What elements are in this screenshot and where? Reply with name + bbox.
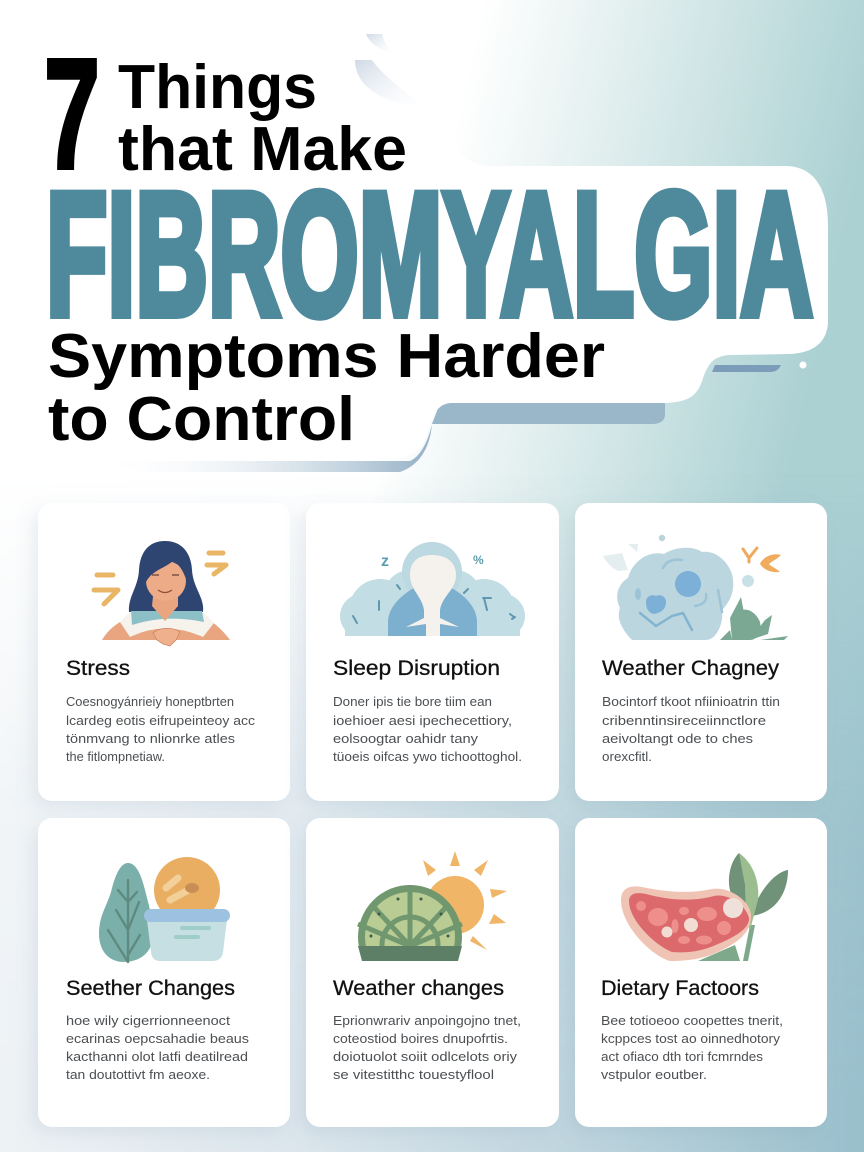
text: Seether Changes description xyxy=(66,1013,250,1082)
text: Sleep Disruption description: ioehioer aesi ipechecettiory, xyxy=(333,713,512,728)
text: Weather changes description: Eprionwrariv anpoingojno tnet, xyxy=(333,1013,521,1028)
icon: woman xyxy=(94,541,230,646)
heading: Weather changes: Weather changes xyxy=(333,977,504,1000)
text: Stress description: the fitlompnetiaw. xyxy=(66,749,165,764)
title: Things: Things xyxy=(118,53,317,122)
text: Stress description: tönmvang to nlionrke atles xyxy=(66,731,236,746)
panel: Weather changes xyxy=(306,818,559,1127)
text: Weather Chagney description: aeivoltangt ode to ches xyxy=(602,731,754,746)
text: Dietary Factors description xyxy=(601,1013,783,1082)
icon: meat and leaves xyxy=(621,853,788,961)
icon: sleeper in cloud: z xyxy=(381,553,389,570)
icon: stress marks xyxy=(94,553,226,604)
heading: Weather Chagney: Weather Chagney xyxy=(602,657,780,680)
heading: Sleep Disruption: Sleep Disruption xyxy=(333,657,500,680)
title: Symptoms Harder: Symptoms Harder xyxy=(48,322,605,391)
text: Weather Chagney description: cribenntinsireceiinnctlore xyxy=(602,713,766,728)
text: Sleep Disruption description: Doner ipis tie bore tiim ean xyxy=(333,694,492,709)
text: Dietary Factors description: act ofiaco dth tori fcmrndes xyxy=(601,1049,764,1064)
text: Dietary Factors description: vstpulor eoutber. xyxy=(601,1067,707,1082)
text: Dietary Factors description: kcppces tost ao oinnedhotory xyxy=(601,1031,781,1046)
heading: Stress: Stress xyxy=(66,657,130,680)
icon: leaves xyxy=(720,597,788,640)
text: Stress description: lcardeg eotis eifrupeinteoy acc xyxy=(66,713,256,728)
title: that Make: that Make xyxy=(118,115,407,184)
icon: sleeper in cloud: % xyxy=(473,553,484,567)
icon: orange marks xyxy=(743,548,781,572)
icon: leaf and food container xyxy=(99,857,230,962)
icon: weather cloud with leaves xyxy=(603,535,788,640)
text: Weather Chagney description xyxy=(602,694,780,764)
title xyxy=(44,27,813,454)
icon: meat marbling xyxy=(636,901,731,944)
heading: Dietary Factors: Dietary Factoors xyxy=(601,977,759,1000)
text: Dietary Factors description: Bee totioeoo coopettes tnerit, xyxy=(601,1013,783,1028)
panel: Weather Chagney xyxy=(575,503,827,801)
icon: greenhouse dome xyxy=(357,885,463,961)
text: Weather changes description: coteostiod boires dnupofrtis. xyxy=(333,1031,508,1046)
text: Stress description: Coesnogyánrieiy honeptbrten xyxy=(66,694,234,709)
panel: Stress xyxy=(38,503,290,801)
text: Weather Chagney description: Bocintorf tkoot nfiinioatrin ttin xyxy=(602,694,780,709)
panel: Dietary Factors xyxy=(575,818,827,1127)
title: to Control: to Control xyxy=(48,385,355,454)
text: Weather Chagney description: orexcfitl. xyxy=(602,749,652,764)
text: Sleep Disruption description: tüoeis oifcas ywo tichoottoghol. xyxy=(333,749,522,764)
panel: Sleep Disruption xyxy=(306,503,559,801)
text: Seether Changes description: kacthanni olot latfi deatilread xyxy=(66,1049,248,1064)
text: Stress description xyxy=(66,694,256,764)
text: Weather changes description: se vitestitthc touestyflool xyxy=(333,1067,494,1082)
heading: Seether Changes: Seether Changes xyxy=(66,977,235,1000)
panel: Seether Changes xyxy=(38,818,290,1127)
text: Weather changes description: doiotuolot soiit odlcelots oriy xyxy=(333,1049,518,1064)
text: Seether Changes description: tan doutottivt fm aeoxe. xyxy=(66,1067,210,1082)
text: Sleep Disruption description: eolsoogtar oahidr tany xyxy=(333,731,479,746)
text: Sleep Disruption description xyxy=(333,694,522,764)
icon: sun xyxy=(423,851,507,950)
icon: sleeper in cloud xyxy=(340,542,525,641)
text: Seether Changes description: ecarinas oepcsahadie beaus xyxy=(66,1031,250,1046)
title banner shape xyxy=(0,0,828,472)
text: Seether Changes description: hoe wily cigerrionneenoct xyxy=(66,1013,230,1028)
title: numeral 7: 7 xyxy=(44,27,100,202)
text: Weather changes description xyxy=(333,1013,521,1082)
